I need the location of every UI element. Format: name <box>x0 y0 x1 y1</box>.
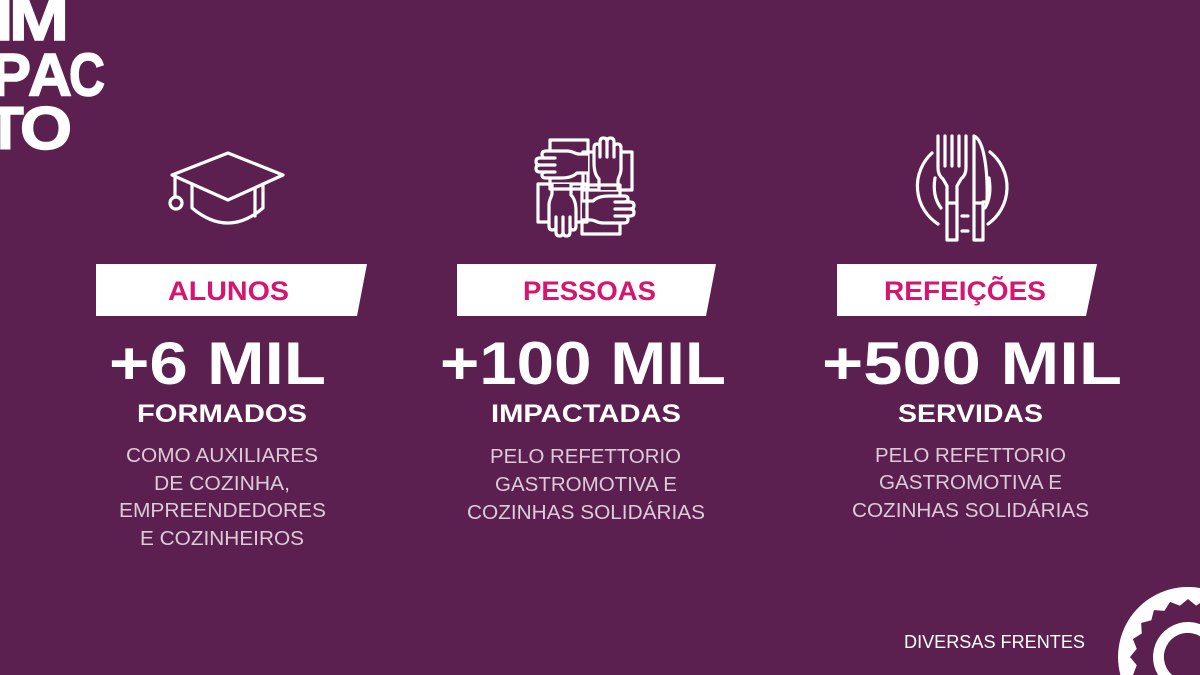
title: O <box>20 95 72 162</box>
description: refeicoes: GASTROMOTIVA E <box>879 472 1062 494</box>
description: alunos: EMPREENDEDORES <box>119 500 326 522</box>
description: refeicoes: COZINHAS SOLIDÁRIAS <box>852 499 1089 522</box>
banner: pessoas: PESSOAS <box>523 276 656 306</box>
number: +6 mil: +6 MIL <box>109 330 326 397</box>
icon: gear logo <box>1118 587 1200 675</box>
banner: alunos: ALUNOS <box>168 276 289 306</box>
panel: refeicoes <box>822 136 1122 522</box>
description: pessoas: GASTROMOTIVA E <box>495 474 677 496</box>
description: alunos: E COZINHEIROS <box>140 528 304 550</box>
description: refeicoes <box>852 445 1089 522</box>
icon: graduation cap <box>170 153 283 223</box>
panel: pessoas <box>440 138 726 524</box>
description: pessoas: PELO REFETTORIO <box>490 446 681 468</box>
banner: alunos <box>96 264 367 316</box>
number: +100 mil: +100 MIL <box>440 330 726 397</box>
icon: four joined hands <box>536 138 634 236</box>
title: C <box>69 42 105 108</box>
subtitle: servidas: SERVIDAS <box>898 400 1043 428</box>
panel: alunos <box>96 153 367 550</box>
description: alunos: COMO AUXILIARES <box>126 445 318 467</box>
icon: plate with fork and knife <box>917 136 1007 240</box>
footer label: DIVERSAS FRENTES <box>904 632 1085 652</box>
description: pessoas <box>467 446 705 524</box>
subtitle: impactadas: IMPACTADAS <box>491 400 681 428</box>
subtitle: formados: FORMADOS <box>137 400 307 428</box>
banner: refeicoes <box>837 264 1097 316</box>
description: pessoas: COZINHAS SOLIDÁRIAS <box>467 501 705 524</box>
banner: pessoas <box>457 264 716 316</box>
title: A <box>28 42 72 108</box>
number: +500 mil: +500 MIL <box>822 330 1122 397</box>
title <box>0 0 105 162</box>
description: alunos: DE COZINHA, <box>154 473 290 495</box>
description: refeicoes: PELO REFETTORIO <box>875 445 1066 467</box>
banner: refeicoes: REFEIÇÕES <box>884 275 1046 306</box>
description: alunos <box>119 445 326 550</box>
